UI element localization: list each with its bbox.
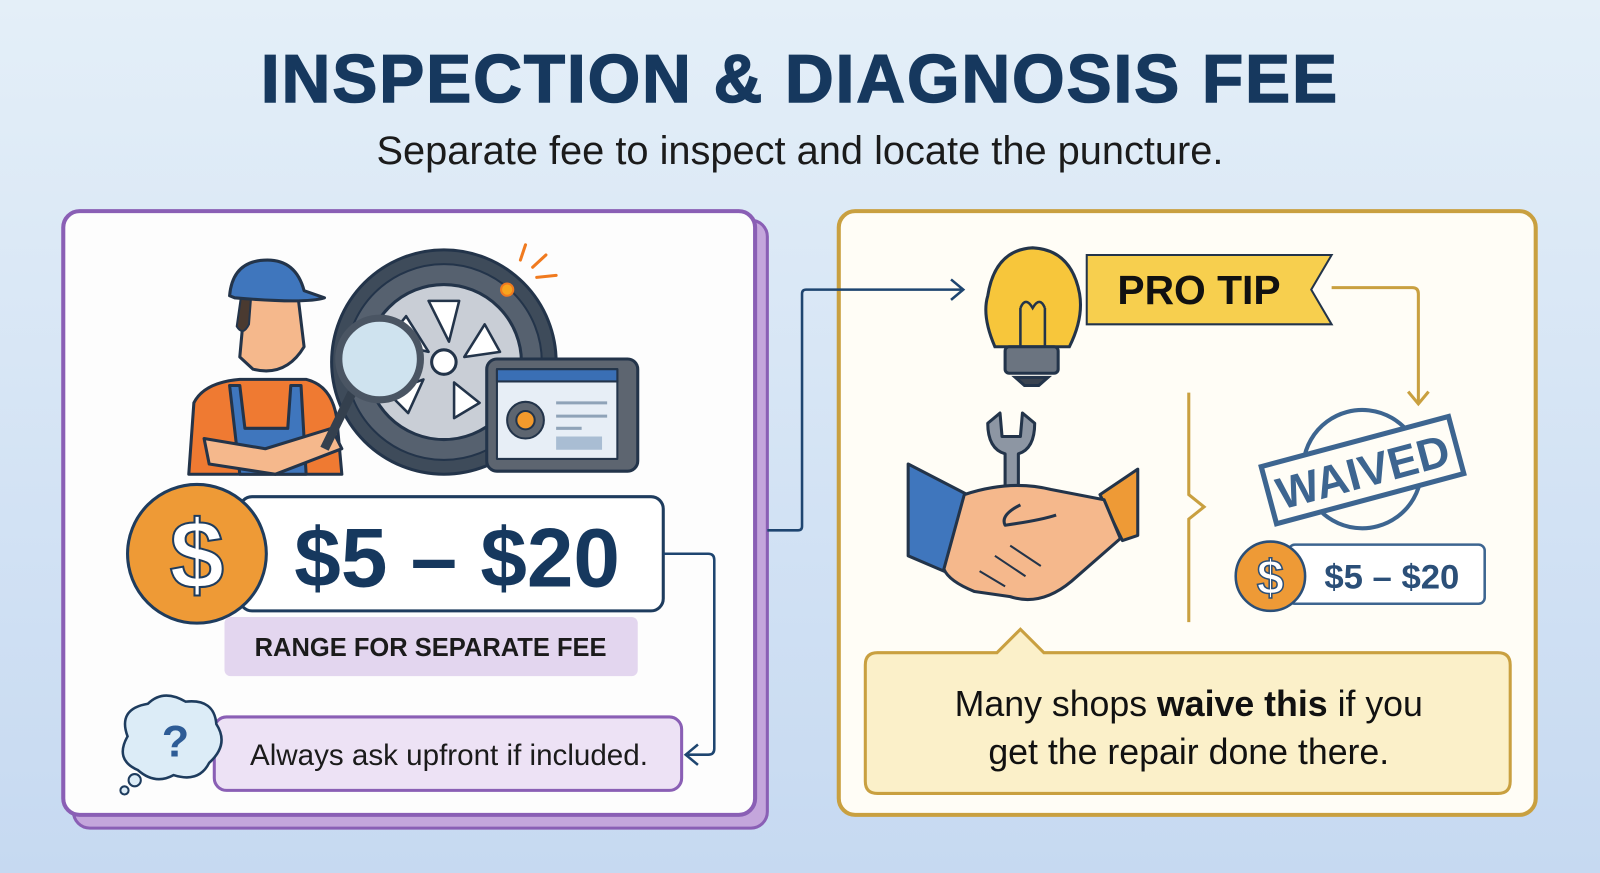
icon: dollar coin: [128, 484, 266, 623]
connector arrow: pro tip to waived: [1332, 288, 1429, 404]
subtitle: Separate fee to inspect and locate the puncture.: [377, 129, 1223, 173]
title: INSPECTION & DIAGNOSIS FEE: [261, 42, 1339, 117]
pro tip banner: PRO TIP: [1117, 267, 1281, 313]
icon: question thought bubble: [120, 696, 222, 794]
range label: RANGE FOR SEPARATE FEE: [255, 634, 607, 662]
icon: question thought bubble: ?: [162, 716, 189, 767]
connector arrow: left panel to pro tip: [767, 279, 963, 530]
panel: separate fee: [63, 211, 767, 828]
waived stamp: WAIVED: [1271, 424, 1455, 519]
icon: dollar coin: $: [170, 499, 224, 609]
waived price: [1236, 542, 1485, 611]
waived price: $: [1257, 552, 1284, 606]
callout: waive tip: get the repair done there.: [988, 732, 1389, 772]
icon: light bulb: [986, 248, 1080, 386]
waived price: $5 – $20: [1324, 558, 1459, 596]
connector arrow: price to ask: [663, 554, 714, 765]
price box: [240, 497, 663, 611]
divider with chevron: [1189, 393, 1204, 622]
illustration: mechanic inspecting tire: [189, 245, 638, 474]
waived stamp: [1253, 387, 1471, 551]
ask upfront box: Always ask upfront if included.: [250, 739, 648, 772]
ask upfront box: [214, 717, 682, 790]
callout: waive tip: [865, 629, 1510, 793]
price box: $5 – $20: [294, 510, 620, 604]
range label: [224, 617, 638, 676]
panel: pro tip: [839, 211, 1536, 815]
icon: handshake with wrench: [908, 413, 1138, 600]
callout: waive tip: Many shops waive this if you: [955, 684, 1423, 724]
pro tip banner: [1087, 255, 1332, 324]
